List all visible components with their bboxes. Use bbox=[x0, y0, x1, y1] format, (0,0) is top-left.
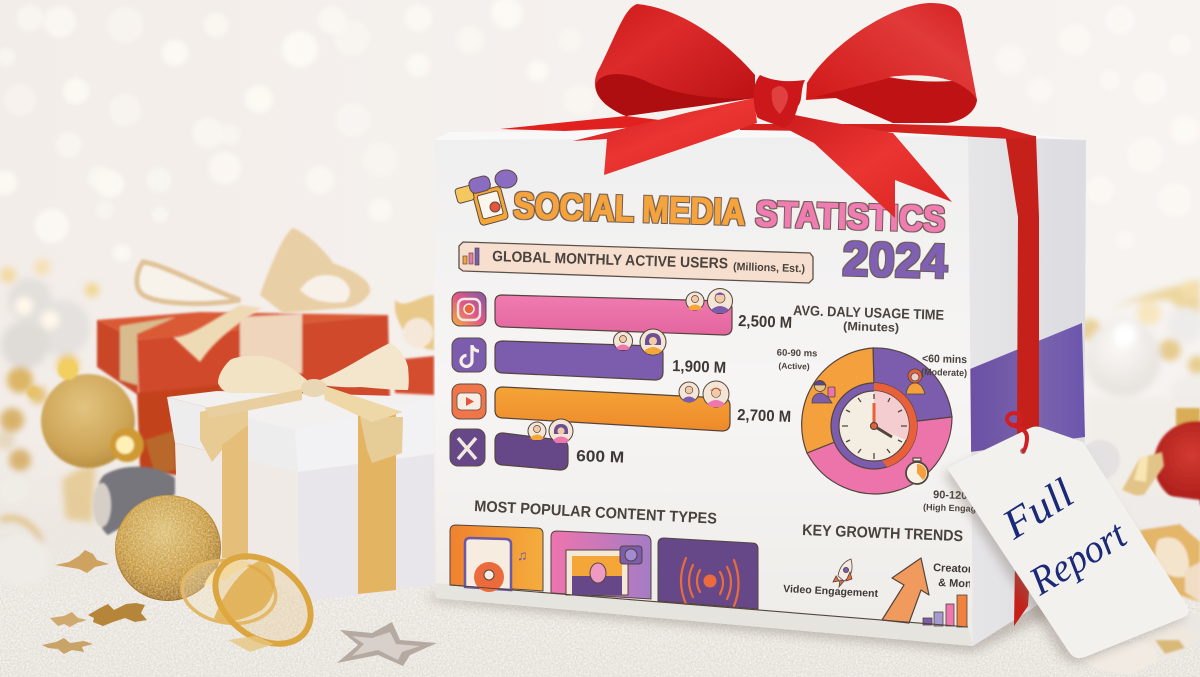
label: creator and monetization bbox=[934, 564, 970, 588]
gold glitter bauble bbox=[114, 494, 222, 602]
title: SOCIAL MEDIA bbox=[513, 185, 746, 233]
banner: global monthly active users: GLOBAL MONTHLY ACTIVE USERS bbox=[492, 248, 728, 272]
knot bbox=[754, 75, 805, 128]
left tail bbox=[573, 98, 757, 175]
Instagram row: 2,500 M bbox=[738, 313, 792, 332]
gift: white box with gold ribbon bbox=[167, 343, 434, 602]
X row bbox=[450, 419, 624, 470]
TikTok row: 1,900 M bbox=[672, 358, 726, 377]
pie labels: 90-120 mins bbox=[933, 489, 996, 503]
mini growth bars bbox=[923, 595, 967, 627]
handwritten text: Report bbox=[1021, 511, 1135, 604]
main gift box bbox=[425, 128, 1090, 652]
bokeh lights bbox=[0, 0, 1200, 262]
Instagram row bbox=[452, 288, 792, 335]
red bow bbox=[500, 3, 1034, 218]
X row: 600 M bbox=[576, 448, 624, 467]
label: creator and monetization: & Monetization bbox=[938, 577, 1017, 592]
pie labels: <60 mins bbox=[922, 353, 967, 366]
title: 2024 bbox=[842, 233, 948, 289]
red bauble bbox=[1154, 408, 1200, 505]
pie labels: (Moderate) bbox=[921, 367, 967, 379]
gold curls and paper shreds bbox=[1080, 440, 1200, 675]
YouTube row bbox=[452, 381, 791, 431]
box right side bbox=[968, 133, 1086, 646]
handwritten text bbox=[994, 470, 1135, 604]
box front bbox=[434, 133, 973, 646]
label: video engagement: Video Engagement bbox=[783, 583, 879, 600]
card: photos bbox=[551, 531, 651, 599]
banner: global monthly active users bbox=[459, 242, 813, 283]
pie labels: (High Engagement) bbox=[923, 502, 1006, 515]
stopwatch bbox=[906, 458, 928, 484]
cream bow loops bbox=[137, 228, 434, 362]
gold ribbon strips bbox=[200, 400, 248, 560]
TikTok row bbox=[452, 329, 726, 380]
pie chart: usage time bbox=[802, 348, 952, 494]
left loop bbox=[595, 4, 755, 116]
heading: content types: MOST POPULAR CONTENT TYPES bbox=[474, 498, 717, 528]
heading: average daily usage bbox=[793, 302, 944, 335]
gold ornament blurred bbox=[27, 360, 175, 475]
pie labels: 60-90 ms bbox=[777, 347, 818, 360]
top edge bbox=[434, 128, 1086, 140]
right background ornaments bbox=[1079, 280, 1200, 675]
card: live broadcast bbox=[658, 538, 758, 609]
handwritten text: Full bbox=[994, 470, 1082, 549]
bar chart: monthly active users bbox=[450, 288, 792, 470]
gift tag bbox=[943, 413, 1189, 664]
curled gold ribbon bbox=[178, 538, 328, 662]
right loop bbox=[806, 3, 977, 123]
ribbon across lid bbox=[500, 116, 1034, 139]
banner: global monthly active users: (Millions, Est.) bbox=[733, 261, 806, 275]
pie labels bbox=[777, 347, 1006, 515]
gold snowflakes bbox=[42, 550, 147, 654]
purple band on side bbox=[970, 323, 1085, 452]
heading: key growth trends: KEY GROWTH TRENDS bbox=[802, 522, 963, 545]
silver cylinder ornament bbox=[93, 467, 175, 535]
silver star bbox=[337, 622, 437, 666]
card: short video: ♫ bbox=[517, 547, 528, 563]
YouTube row: 2,700 M bbox=[737, 407, 791, 426]
person with hood bbox=[906, 369, 925, 394]
icon: small bar chart bbox=[463, 248, 479, 265]
snowy floor bbox=[0, 430, 1200, 677]
person with phone bbox=[812, 380, 835, 403]
left background ornaments bbox=[0, 259, 99, 586]
cream satin bow bbox=[218, 356, 307, 393]
gift: red box with cream bow bbox=[97, 228, 434, 475]
right tail bbox=[780, 112, 952, 218]
heading: average daily usage: (Minutes) bbox=[843, 319, 899, 335]
red side ribbon bbox=[1005, 133, 1039, 626]
pie labels: (Active) bbox=[778, 361, 810, 371]
red string loop bbox=[1007, 413, 1027, 452]
header icon: phone with chat bubbles bbox=[454, 170, 517, 226]
bottom fold bbox=[435, 583, 973, 646]
growth arrow bbox=[882, 558, 929, 623]
title: STATISTICS bbox=[755, 193, 946, 240]
label: creator and monetization: Creator Economy bbox=[933, 562, 1026, 578]
title bbox=[513, 185, 948, 289]
icon: rocket bbox=[833, 559, 852, 587]
heading: average daily usage: AVG. DALY USAGE TIME bbox=[793, 302, 944, 323]
clock bbox=[831, 383, 917, 469]
baseline bbox=[450, 585, 968, 627]
card: short video bbox=[450, 525, 543, 592]
